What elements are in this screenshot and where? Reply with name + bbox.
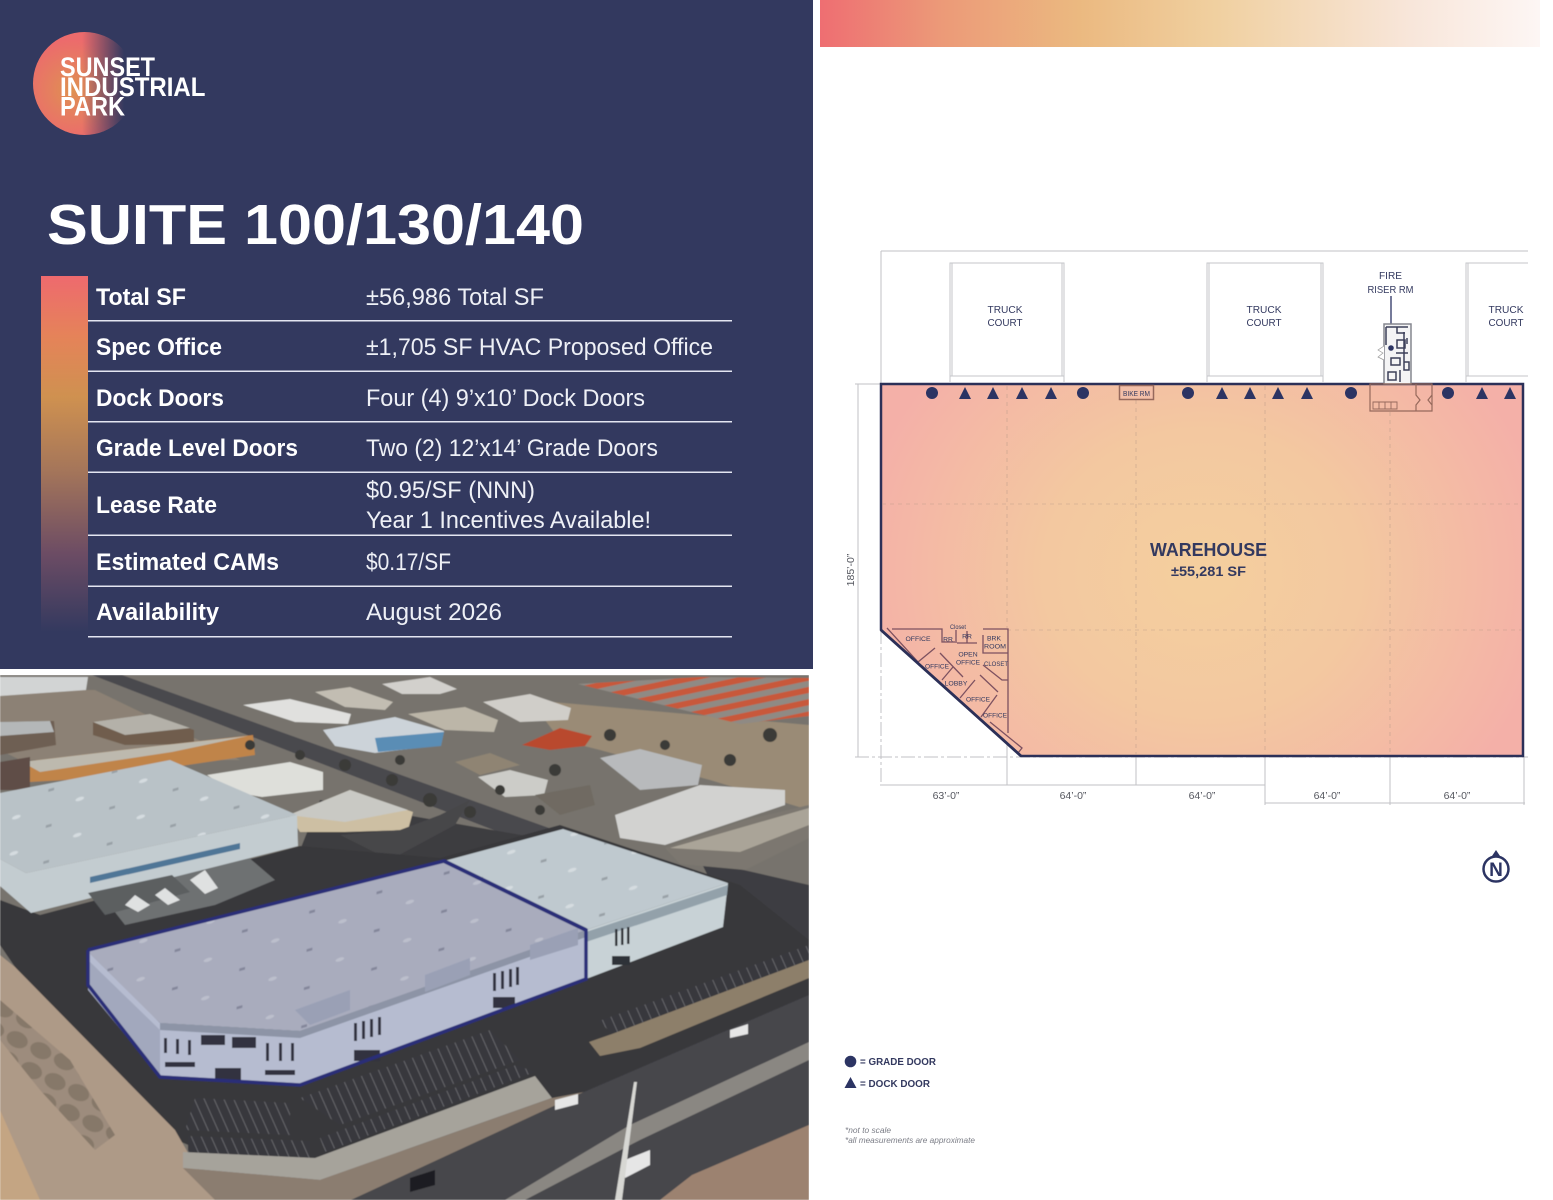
fire riser room: FIRE bbox=[1379, 270, 1402, 282]
highlighted suite bbox=[88, 861, 586, 1031]
truck court 1: COURT bbox=[988, 317, 1023, 329]
trees, vehicles and equipment bbox=[245, 728, 777, 818]
dimension labels: 63’-0” bbox=[933, 790, 960, 802]
truck court 2: COURT bbox=[1246, 317, 1282, 329]
dimension labels bbox=[845, 553, 1471, 802]
loading yard and left building bbox=[115, 858, 275, 926]
bike room: BIKE RM bbox=[1123, 391, 1150, 398]
legend: dock door: = DOCK DOOR bbox=[860, 1078, 930, 1090]
office area: Closet bbox=[950, 624, 966, 631]
floor plan bbox=[845, 251, 1528, 805]
row: Lease Rate: $0.95/SF (NNN) bbox=[366, 477, 535, 504]
row: Grade Level Doors: Grade Level Doors bbox=[96, 435, 298, 462]
truck court 2 bbox=[1207, 263, 1323, 382]
logo: Sunset Industrial Park: INDUSTRIAL bbox=[60, 72, 205, 102]
truck court 2: TRUCK bbox=[1246, 304, 1282, 316]
dimension labels: 64’-0” bbox=[1189, 790, 1216, 802]
footnotes bbox=[845, 1125, 975, 1145]
office area: LOBBY bbox=[944, 680, 968, 688]
office area: RR bbox=[962, 634, 972, 640]
dimension labels: 64’-0” bbox=[1444, 790, 1471, 802]
fire riser room bbox=[1368, 270, 1432, 411]
office area bbox=[881, 624, 1022, 756]
office area: OFFICE bbox=[956, 660, 980, 666]
aerial photo of the property bbox=[0, 675, 809, 1200]
office area: ROOM bbox=[984, 644, 1006, 650]
row: Total SF: Total SF bbox=[96, 284, 186, 311]
row: Total SF: ±56,986 Total SF bbox=[366, 284, 544, 311]
title: SUITE 100/130/140 bbox=[47, 193, 584, 257]
logo: Sunset Industrial Park: SUNSET bbox=[60, 52, 155, 82]
asphalt bbox=[0, 825, 809, 1170]
logo: Sunset Industrial Park: PARK bbox=[60, 92, 125, 122]
row: Spec Office bbox=[88, 334, 732, 372]
footnotes: *not to scale bbox=[845, 1125, 891, 1135]
row: Estimated CAMs: $0.17/SF bbox=[366, 549, 451, 576]
bike room bbox=[1120, 386, 1154, 400]
row: Availability: August 2026 bbox=[366, 599, 502, 626]
row: Lease Rate: Lease Rate bbox=[96, 492, 217, 519]
parking and streets bbox=[300, 1030, 520, 1125]
truck court 3: COURT bbox=[1488, 317, 1524, 329]
row: Dock Doors: Dock Doors bbox=[96, 385, 224, 412]
office area: OFFICE bbox=[925, 664, 949, 670]
icon: north compass bbox=[1484, 850, 1508, 882]
row: Availability bbox=[88, 599, 732, 638]
dock door markers bbox=[959, 387, 1516, 399]
warehouse label: WAREHOUSE bbox=[1150, 539, 1267, 560]
office area: BRK bbox=[987, 636, 1001, 642]
row: Lease Rate: Year 1 Incentives Available! bbox=[366, 507, 651, 534]
right suite bbox=[444, 829, 728, 930]
truck court 1: TRUCK bbox=[988, 304, 1022, 316]
grade door markers bbox=[926, 387, 1454, 399]
top gradient bar bbox=[820, 0, 1540, 47]
office area: OFFICE bbox=[906, 636, 931, 643]
footnotes: *all measurements are approximate bbox=[845, 1135, 975, 1145]
office area: RR bbox=[943, 636, 953, 644]
row: Lease Rate bbox=[88, 477, 732, 536]
truck court 3 bbox=[1466, 263, 1528, 382]
logo: Sunset Industrial Park bbox=[30, 28, 212, 140]
office area: CLOSET bbox=[984, 661, 1008, 668]
row: Availability: Availability bbox=[96, 599, 219, 626]
panel: navy header bbox=[0, 0, 813, 669]
dimension lines bbox=[855, 251, 1528, 805]
row: Grade Level Doors: Two (2) 12’x14’ Grade Doors bbox=[366, 435, 658, 462]
dimension labels: 64’-0” bbox=[1314, 790, 1341, 802]
dimension labels: 185’-0” bbox=[845, 553, 857, 586]
specification table bbox=[88, 284, 732, 638]
icon: north compass: N bbox=[1489, 860, 1503, 881]
office area: OFFICE bbox=[966, 696, 990, 704]
gradient side bar bbox=[41, 276, 88, 632]
warehouse floor bbox=[881, 384, 1523, 756]
warehouse label bbox=[1150, 539, 1267, 579]
dimension labels: 64’-0” bbox=[1060, 790, 1087, 802]
row: Grade Level Doors bbox=[88, 435, 732, 473]
legend bbox=[844, 1056, 936, 1090]
row: Estimated CAMs bbox=[88, 549, 732, 587]
warehouse label: ±55,281 SF bbox=[1171, 563, 1246, 579]
row: Dock Doors: Four (4) 9’x10’ Dock Doors bbox=[366, 385, 645, 412]
row: Total SF bbox=[88, 284, 732, 322]
row: Dock Doors bbox=[88, 385, 732, 422]
row: Estimated CAMs: Estimated CAMs bbox=[96, 549, 279, 576]
legend: grade door: = GRADE DOOR bbox=[860, 1056, 936, 1068]
row: Spec Office: ±1,705 SF HVAC Proposed Office bbox=[366, 334, 713, 361]
office area: OPEN bbox=[958, 652, 978, 658]
desert foreground bbox=[0, 955, 215, 1200]
truck court 1 bbox=[950, 263, 1064, 382]
truck court 3: TRUCK bbox=[1488, 304, 1524, 316]
fire riser room: RISER RM bbox=[1368, 284, 1414, 296]
row: Spec Office: Spec Office bbox=[96, 334, 222, 361]
surrounding buildings bbox=[0, 677, 88, 696]
column grid bbox=[882, 386, 1522, 755]
highlight outline bbox=[88, 861, 586, 1085]
office area: OFFICE bbox=[983, 712, 1007, 720]
